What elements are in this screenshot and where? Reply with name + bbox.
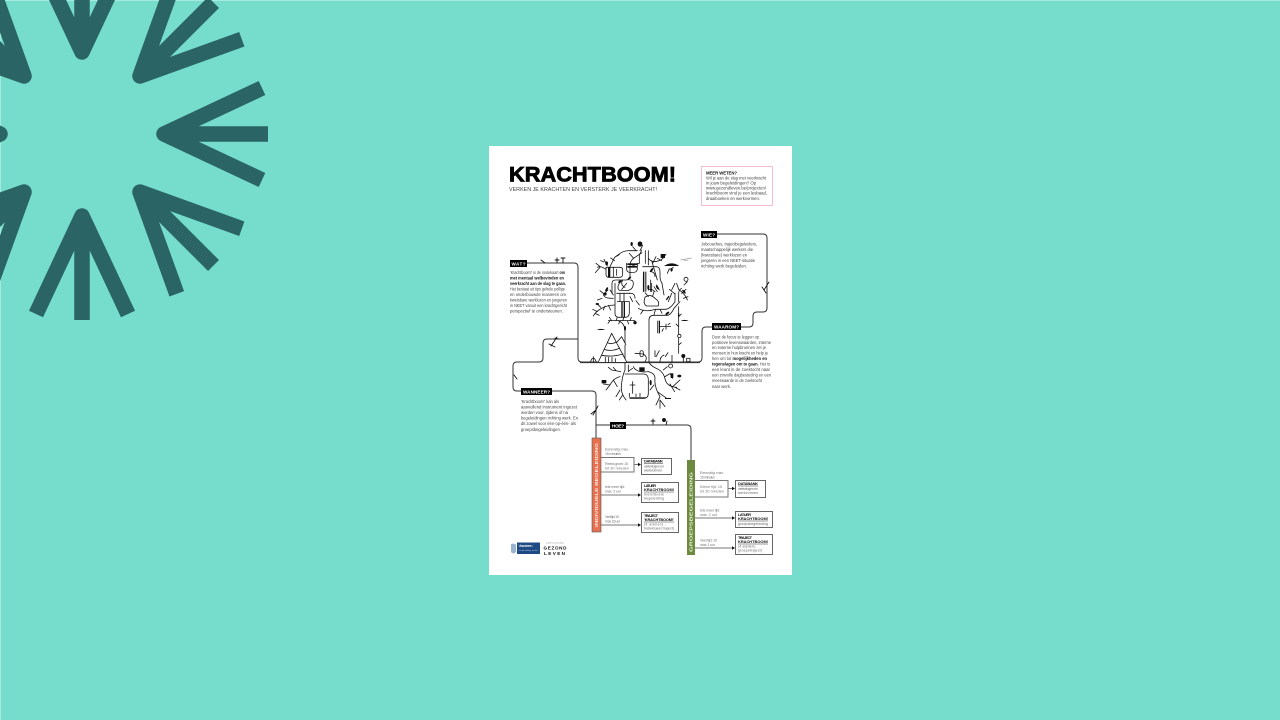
box leidraad: LATUER — [644, 483, 656, 488]
block: wat: perspectief te ondersteunen. — [510, 308, 563, 314]
block: waarom: en externe hulpbronnen zet je — [712, 345, 767, 350]
info box: meer weten — [702, 166, 772, 206]
block: wanneer: aanvullend instrument ingezet — [521, 404, 578, 410]
box leidraad: individuele — [644, 492, 664, 496]
block: wanneer: groepsbegeleidingen. — [521, 427, 561, 432]
panel: individuele begeleiding: max 1,5 uur — [605, 520, 621, 524]
panel: individuele begeleiding: Reeks groet: 15 — [605, 462, 628, 466]
panel: individuele begeleiding: Veel tijd: 10 — [605, 515, 619, 519]
box leidraad — [736, 512, 772, 528]
arrows — [600, 458, 640, 525]
root details — [602, 367, 681, 399]
block: wat: 'Krachtboom!' is de routekaart om — [510, 270, 565, 275]
orange bar: INDIVIDUELE BEGELEIDING — [594, 442, 599, 527]
logo: gezond leven: ondersteund door — [546, 542, 564, 544]
block: wanneer — [521, 388, 579, 432]
logos — [511, 542, 567, 556]
block: wie: maatschappelijk werkers die — [701, 247, 754, 252]
block: waarom: naar werk. — [712, 384, 731, 389]
block: waarom: mensen in hun kracht en help je — [712, 350, 768, 356]
box leidraad: KRACHTBOOM! — [644, 487, 674, 492]
ground figures — [591, 351, 683, 362]
panel: individuele begeleiding: max. 2 uur — [605, 490, 622, 494]
block: wat: in NEET vanuit een krachtgericht — [510, 303, 568, 308]
box traject: KRACHTBOOM! — [738, 539, 768, 544]
arrowheads — [638, 463, 641, 527]
panel: groepsbegeleiding: max. 2 uur — [700, 513, 718, 517]
panel: groepsbegeleiding: Veel tijd: 10 — [700, 538, 717, 542]
logo: gezond leven — [544, 542, 567, 556]
box traject: TRAJECT — [738, 535, 753, 540]
poster sheet — [489, 146, 792, 575]
logo: vlaanderen: verbeelding werkt — [518, 549, 538, 552]
title: KRACHTBOOM! — [509, 164, 676, 186]
panel: groepsbegeleiding: Kleine tijd: 15 — [700, 485, 722, 489]
box databank: werkvormen — [738, 491, 758, 495]
poster — [489, 146, 792, 575]
panel: individuele begeleiding: 15 minuten — [605, 452, 621, 456]
box leidraad: LATUER — [738, 512, 751, 517]
block: wie: jongeren in een NEET-situatie — [700, 258, 756, 263]
panel: groepsbegeleiding — [687, 460, 772, 555]
logo: gezond leven: GEZOND — [544, 546, 567, 550]
block: wat: kwetsbare werklozen en jongeren — [510, 298, 567, 302]
connector lines — [513, 234, 767, 460]
panel: groepsbegeleiding: tot 30 minuten — [700, 490, 724, 494]
block: wat: en onderbouwde manieren om — [510, 292, 566, 297]
panel: groepsbegeleiding: max 1 uur — [700, 543, 716, 547]
block: wanneer: begeleidingen richting werk. En — [521, 416, 579, 420]
block: waarom: meerwaarde in de zoektocht — [712, 378, 763, 383]
panel: groepsbegeleiding: Iets meer tijd: — [700, 508, 720, 512]
block: wie — [700, 231, 757, 268]
box traject — [736, 534, 772, 554]
info box: meer weten: krachtboom vind je een lesbaad, — [706, 190, 767, 196]
panel: individuele begeleiding: Eenmalig: max. — [605, 448, 629, 452]
box databank: DATABANK — [644, 458, 663, 464]
box traject: (4 ateliers : — [644, 522, 666, 526]
decorative arrow burst — [0, 0, 268, 320]
label wanneer: WANNEER? — [523, 390, 550, 394]
ground line — [580, 361, 700, 364]
arrows — [695, 480, 734, 548]
box leidraad: groepsbegeleiding — [738, 522, 768, 526]
arrowheads — [732, 487, 735, 550]
panel: groepsbegeleiding: Eenmalig: max. — [700, 471, 724, 475]
panel: individuele begeleiding: Iets meer tijd: — [605, 485, 625, 489]
info box: meer weten: in jouw begeleidingen? Op — [706, 180, 757, 186]
thin clouds — [681, 258, 692, 261]
box traject: 'KRACHTBOOM!' — [644, 517, 674, 522]
box databank — [642, 458, 672, 474]
box databank: DATABANK — [738, 481, 758, 486]
striped blocks — [608, 263, 670, 333]
green bar: GROEPSBEGELEIDING — [688, 472, 694, 552]
info box: meer weten: MEER WETEN? — [706, 170, 737, 176]
logo: vlaanderen — [517, 542, 540, 554]
block: waarom: tegenslagen om te gaan. Het is — [712, 362, 771, 366]
block: wanneer: 'Krachtboom!' kan als — [521, 399, 560, 404]
tree illustration — [580, 241, 700, 408]
logo: vlaanderen: Vlaanderen — [518, 544, 532, 548]
roots — [603, 353, 680, 408]
block: wie: richting werk begeleiden. — [701, 264, 747, 268]
block: wanneer: worden voor, tijdens of na — [521, 410, 569, 415]
box traject: groepstraject) — [738, 548, 762, 552]
panel: groepsbegeleiding: 15 minuten — [700, 476, 715, 480]
box leidraad: KRACHTBOOM! — [738, 516, 768, 521]
box traject: TRAJECT — [644, 513, 659, 518]
label hoe — [610, 422, 626, 429]
block: waarom: positieve levenswaarden, interne — [712, 340, 772, 345]
block: wat: veerkracht aan de slag te gaan. — [510, 281, 566, 286]
box traject — [642, 512, 678, 532]
box databank: oefeningen en — [644, 464, 664, 468]
box databank — [736, 480, 766, 498]
box databank: werkvormen — [644, 468, 662, 472]
line sprouts — [514, 258, 769, 425]
box leidraad — [642, 482, 678, 502]
panel: individuele begeleiding: tot 30 minuten — [605, 466, 629, 470]
block: waarom: een zinvolle dagbesteding en een — [712, 372, 771, 378]
block: waarom: een leunt in de zoektocht naar — [712, 367, 771, 372]
box traject: (4 ateliers, — [738, 544, 756, 548]
logo: gezond leven: LEVEN — [544, 551, 566, 556]
label wat: WAT? — [512, 262, 526, 266]
small open circles — [640, 277, 690, 368]
block: wie: (kwetsbare) werklozen en — [701, 252, 748, 258]
block: wat: Het bestaat uit tips gehele pollige — [510, 286, 565, 292]
box traject: individueel traject) — [644, 526, 674, 530]
trunk and crown branches — [593, 245, 688, 362]
label hoe: HOE? — [612, 424, 624, 428]
label wie: WIE? — [703, 232, 715, 238]
label waarom: WAAROM? — [714, 324, 739, 330]
info box: meer weten: Wil je aan de slag met veerkracht — [706, 176, 767, 180]
block: waarom — [712, 323, 772, 389]
subtitle: VERKEN JE KRACHTEN EN VERSTERK JE VEERKRACHT! — [509, 187, 657, 193]
block: waarom: hen om tot mogelijkheden en — [712, 356, 767, 361]
block: wie: Jobcoaches, trajectbegeleiders, — [701, 242, 757, 246]
block: wat — [510, 260, 568, 314]
block: wat: met mentaal welbevinden en — [510, 276, 564, 280]
block: wanneer: dit zowel voor één-op-één- als — [521, 421, 577, 426]
box databank: oefeningen en — [738, 487, 758, 491]
mountains — [598, 333, 627, 362]
info box: meer weten: draaiboeken en werkvormen. — [706, 196, 760, 201]
block: waarom: Door de focus te leggen op — [712, 334, 759, 340]
panel: individuele begeleiding — [592, 438, 678, 532]
box leidraad: begeleiding — [644, 496, 664, 500]
logo: vlaanderen crest — [511, 544, 516, 554]
info box: meer weten: www.gezondleven.be/projecten/ — [706, 186, 767, 190]
leaves — [596, 241, 689, 358]
